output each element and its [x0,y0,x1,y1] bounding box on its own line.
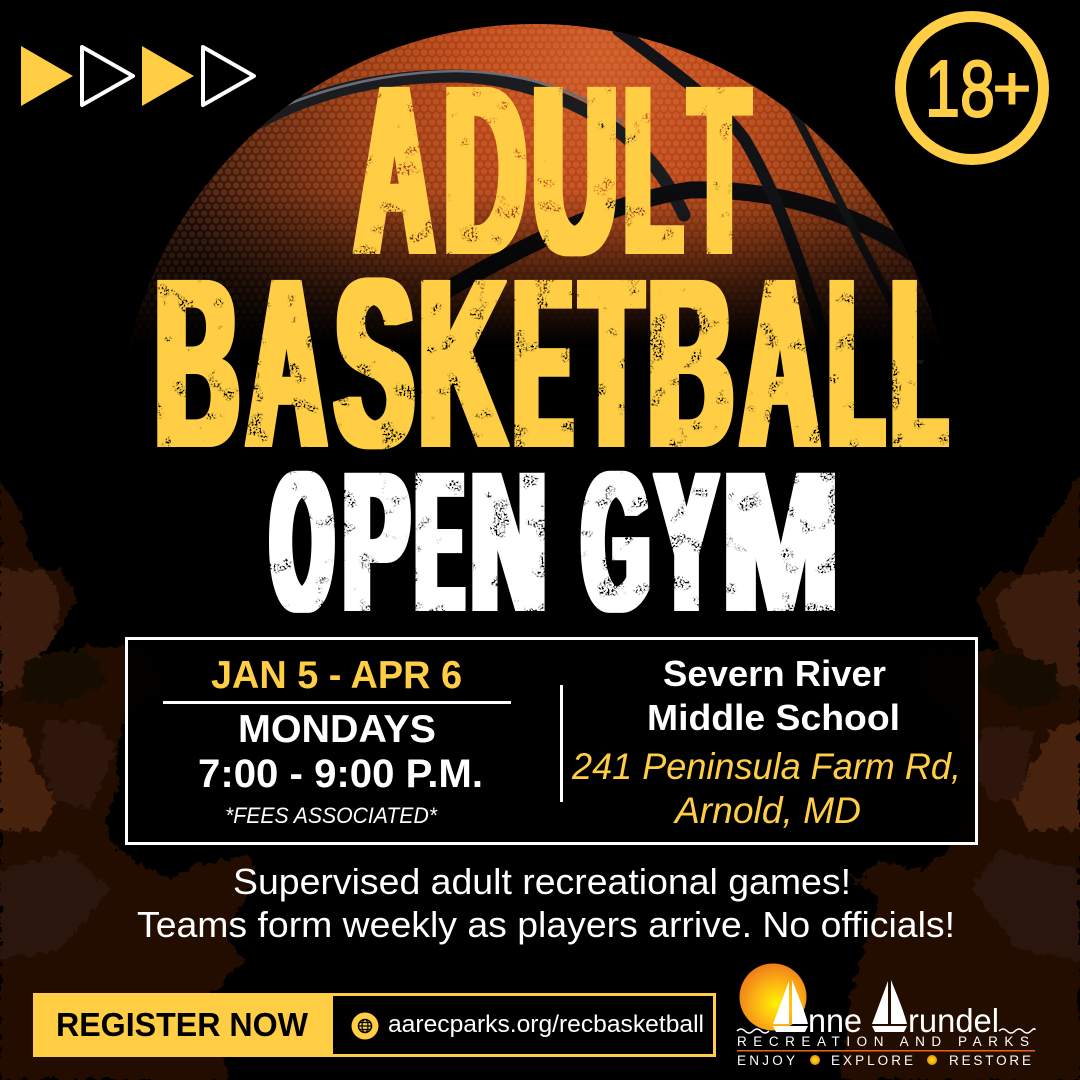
title: adult basketball [156,36,946,497]
title: adult basketball: T [691,36,748,304]
title: adult basketball: A [248,229,325,497]
title: adult basketball: S [336,229,413,497]
title: adult basketball: L [830,229,883,497]
panel: schedule and location: Arnold, MD [673,790,861,831]
title: open gym: M [723,431,838,652]
school name: Severn River [663,653,886,694]
button: register now [33,993,331,1057]
ball seams [205,30,925,360]
logo: Anne Arundel Recreation and Parks: EXPLORE [831,1053,913,1068]
panel: schedule and location [126,638,976,844]
logo: Anne Arundel Recreation and Parks: RESTORE [949,1053,1031,1068]
title: adult basketball: T [582,229,641,497]
description text: Teams form weekly as players arrive. No officials! [137,904,955,945]
title: adult basketball: A [356,36,433,304]
logo tagline: ENJOY [737,1053,795,1068]
date range: JAN 5 - APR 6 [211,654,462,697]
badge: 18+ [900,16,1044,160]
title: open gym: P [344,431,408,652]
title: adult basketball: L [625,36,681,304]
logo subtitle: RECREATION AND PARKS [737,1034,1029,1049]
logo: Anne Arundel Recreation and Parks: rundel [908,1002,999,1039]
logo waves [737,1029,1035,1033]
date rule [163,701,511,704]
day: MONDAYS [238,708,436,751]
icon: four play arrows [21,46,254,106]
logo sails [773,980,808,1032]
icon: globe [352,1012,378,1040]
smoke: right [835,470,1080,1080]
text: L [893,229,946,497]
fees note: *FEES ASSOCIATED* [225,803,438,828]
title: adult basketball: D [445,36,525,304]
url: aarecparks.org/recbasketball [388,1011,704,1038]
title: open gym [272,431,838,652]
title: adult basketball: B [648,229,733,497]
time: 7:00 - 9:00 P.M. [198,752,483,796]
title: adult basketball: E [515,229,571,497]
title: adult basketball: U [533,36,617,304]
title: open gym: O [272,431,332,652]
panel: schedule and location: Middle School [647,697,900,738]
title: open gym: G [583,431,649,652]
title: adult basketball: B [156,229,238,497]
logo sun [740,964,806,1030]
title: adult basketball: K [419,229,505,497]
title: open gym: E [417,431,462,652]
column divider [560,685,563,802]
logo name: nne [808,1002,862,1039]
title: adult basketball: A [742,229,818,497]
website link box [332,994,714,1056]
logo: Anne Arundel Recreation and Parks [737,964,1035,1068]
title: open gym: N [472,431,546,652]
button: register now: REGISTER NOW [56,1006,309,1043]
title: open gym: Y [657,431,716,652]
smoke: left [0,480,255,1080]
logo rule [737,1050,1035,1052]
badge: 18+: + [993,55,1031,122]
badge: 18+: 18 [925,44,995,133]
description text: Supervised adult recreational games! [233,861,851,902]
description text [137,861,955,945]
basketball [100,20,980,360]
address: 241 Peninsula Farm Rd, [571,746,961,787]
